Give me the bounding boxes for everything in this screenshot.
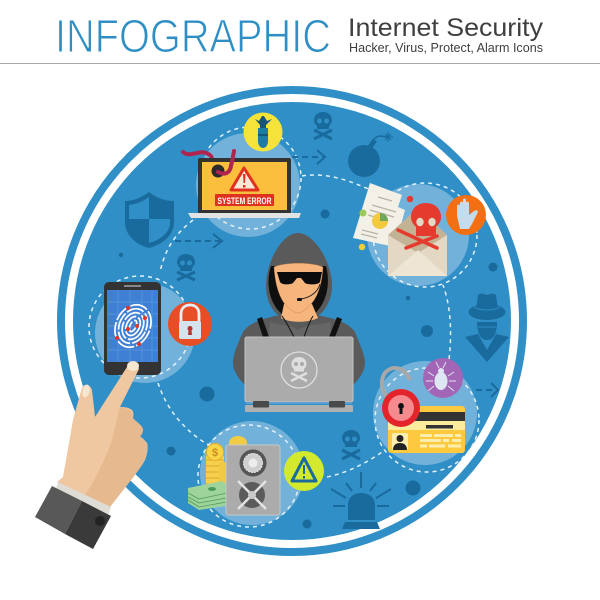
light circles behind the icon groups <box>95 133 477 525</box>
coins back <box>229 436 247 450</box>
main circle background <box>61 90 523 552</box>
coin top <box>206 444 224 460</box>
hat band <box>474 307 500 310</box>
icon: green circle warning <box>284 451 324 491</box>
mic tip <box>297 298 302 301</box>
face <box>274 263 323 313</box>
hacker figure <box>233 233 365 412</box>
portrait tile <box>392 433 408 450</box>
laptop base <box>188 213 301 218</box>
hood <box>266 233 332 318</box>
decorative dots <box>119 210 498 528</box>
fingerprint markers <box>115 306 147 346</box>
spy glasses <box>478 326 496 328</box>
icon: spy <box>465 294 509 362</box>
arrow: from card <box>476 383 498 397</box>
banknote stack lines <box>188 492 232 507</box>
card text lines <box>420 436 461 446</box>
worm front <box>218 151 234 174</box>
error label text: SYSTEM ERROR <box>218 196 272 207</box>
worm <box>183 152 212 160</box>
icon: shield <box>125 192 174 248</box>
neck <box>281 304 318 322</box>
icon: purple circle with bug <box>423 358 463 398</box>
thumb nail <box>81 384 91 398</box>
safe wheel <box>238 481 266 509</box>
arrow: to shield <box>175 234 222 248</box>
keyhole <box>398 403 404 414</box>
subtitle: Hacker, Virus, Protect, Alarm Icons <box>349 40 543 55</box>
document lines <box>361 197 396 238</box>
worm hole <box>212 164 224 178</box>
fingerprint <box>108 299 158 353</box>
envelope flap <box>388 208 447 253</box>
icon group: laptop system error <box>183 151 301 218</box>
skull eyes <box>416 218 436 226</box>
padlock face <box>388 395 414 421</box>
warning mark <box>243 174 246 188</box>
icon: alarm <box>331 472 391 529</box>
phone body <box>104 282 161 375</box>
envelope <box>388 208 447 276</box>
warning triangle <box>231 168 258 190</box>
headset mic <box>300 284 320 299</box>
safe body <box>226 445 280 515</box>
icon group: card and lock <box>382 368 465 453</box>
icon: skull top <box>314 112 332 139</box>
spy face <box>477 322 497 340</box>
hat crown <box>476 294 498 310</box>
banknotes <box>188 481 232 510</box>
pie slice <box>380 213 388 221</box>
card number band <box>388 421 465 430</box>
icon group: infected mail <box>353 183 447 276</box>
sleeve left <box>35 486 82 534</box>
hair <box>268 266 328 315</box>
icon: bomb <box>348 132 393 177</box>
screen grid <box>107 290 158 362</box>
pie chart <box>372 213 388 229</box>
cuff button <box>95 516 105 526</box>
hand pointing <box>35 361 148 549</box>
laptop screen <box>198 158 291 214</box>
hand shading <box>85 407 147 507</box>
heading: internet security: Internet Security <box>348 14 544 42</box>
shirt cuff <box>56 482 111 516</box>
icon group: phone fingerprint <box>104 282 161 375</box>
open shackle <box>382 368 410 396</box>
arrow: from laptop <box>292 150 325 164</box>
hacker laptop lid <box>245 337 353 402</box>
dashed connector paths <box>89 127 479 527</box>
error label box <box>215 194 274 206</box>
coin stack <box>206 454 224 490</box>
card digits <box>426 425 453 428</box>
phone screen <box>107 290 158 362</box>
icon group: safe <box>188 436 280 515</box>
magnetic stripe <box>415 412 465 421</box>
hoodie cords <box>257 317 342 337</box>
laptop base <box>245 405 353 412</box>
icon: skull lower <box>342 430 360 459</box>
id card <box>388 406 465 453</box>
coin dollar: $ <box>212 447 218 459</box>
laptop display <box>202 162 287 210</box>
laptop blue hinge <box>246 402 352 404</box>
safe dial <box>240 450 266 476</box>
speaker <box>124 285 141 287</box>
icon: skull left <box>177 254 195 280</box>
title: INFOGRAPHIC <box>55 10 331 62</box>
laptop skull emblem <box>281 352 317 388</box>
hacker body <box>233 315 365 385</box>
portrait <box>393 435 407 450</box>
icon: yellow circle with missile <box>244 112 282 152</box>
sleeve right <box>65 501 111 549</box>
document <box>353 183 405 247</box>
red padlock <box>382 389 420 427</box>
hand <box>57 365 148 507</box>
spy coat <box>465 334 509 362</box>
virus dots <box>359 196 413 250</box>
nail <box>127 361 139 371</box>
earphone cords <box>282 316 313 337</box>
hat brim <box>468 304 506 320</box>
coin second stack <box>219 462 231 486</box>
crossbones <box>398 230 437 248</box>
envelope fold <box>388 250 447 276</box>
coin stack lines <box>206 460 224 484</box>
sunglasses <box>277 272 322 284</box>
icon: orange circle with hand <box>446 195 486 235</box>
red skull <box>411 203 441 236</box>
banknote face <box>208 487 216 491</box>
chest <box>268 322 332 337</box>
laptop hinges <box>253 401 345 408</box>
icon: red circle with padlock <box>168 302 212 346</box>
